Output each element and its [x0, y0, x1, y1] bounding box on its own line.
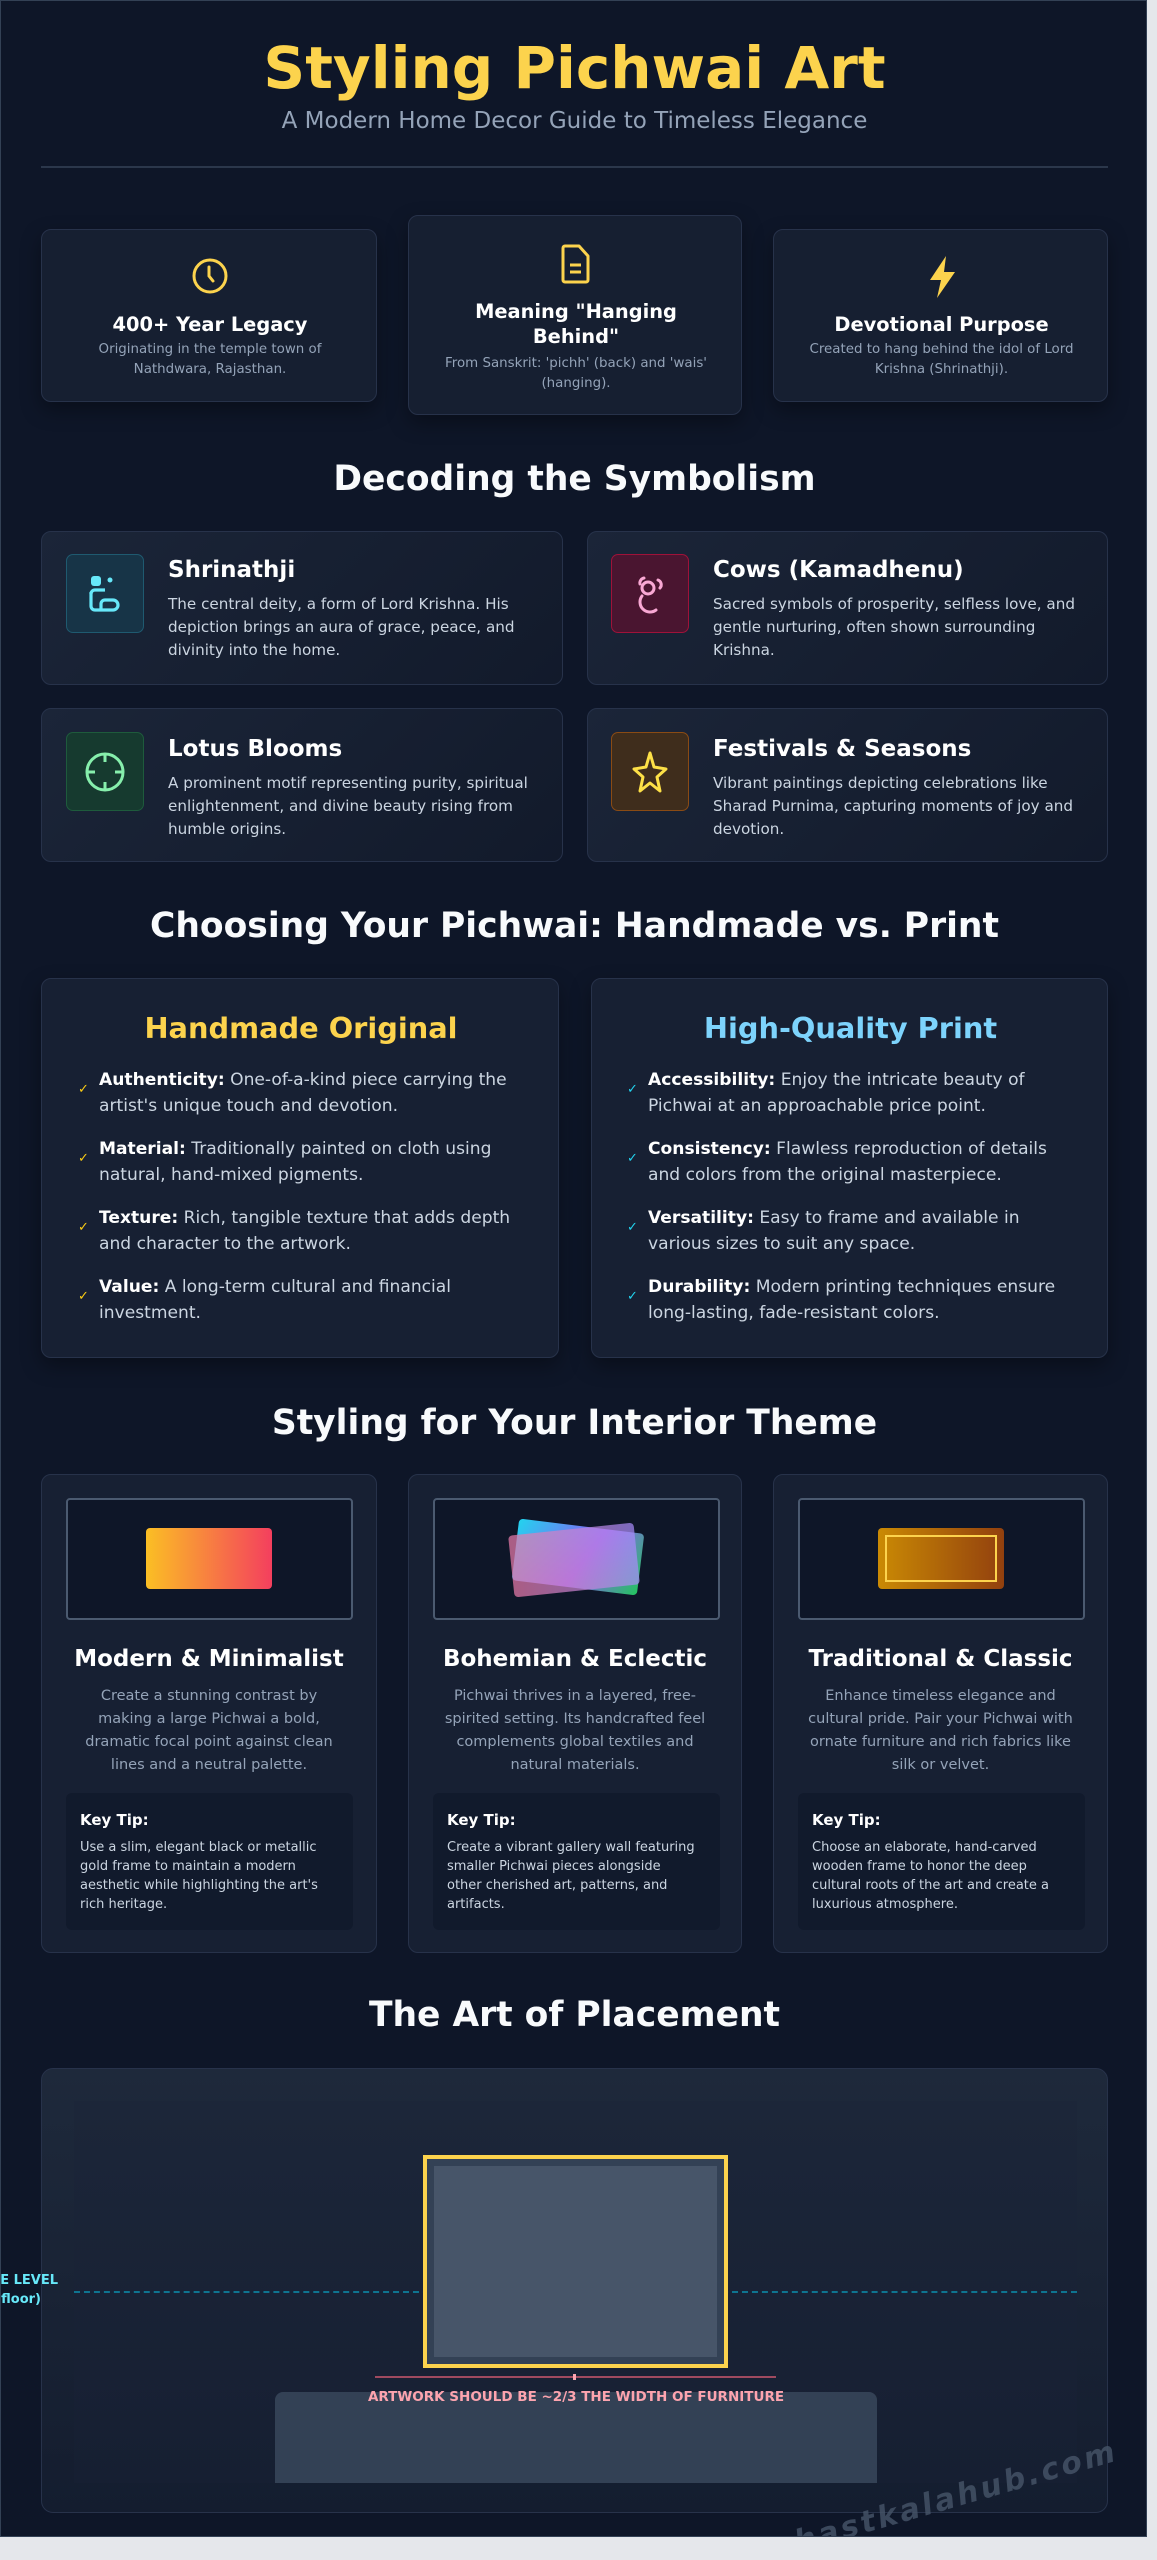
icon: lotus: [66, 732, 144, 811]
eye level line: [74, 2291, 1077, 2293]
furniture: [275, 2392, 877, 2483]
label: width guide: ARTWORK SHOULD BE ~2/3 THE WIDTH OF FURNITURE: [368, 2389, 784, 2405]
callout: traditional tip: cultural roots of the art and create a: [812, 1878, 1049, 1893]
text: traditional: [808, 1688, 1073, 1773]
text: lotus: [168, 774, 528, 838]
list: handmade: Authenticity: One-of-a-kind piece carrying the: [99, 1070, 507, 1090]
list: print: Versatility: Easy to frame and available in: [648, 1208, 1020, 1228]
icon: clock: [192, 258, 228, 294]
heading: festivals: Festivals & Seasons: [713, 736, 971, 762]
icon: document: [562, 244, 590, 284]
list: handmade: ✓: [78, 1082, 89, 1097]
text: festivals: Sharad Purnima, capturing moments of joy and: [713, 797, 1073, 815]
callout: modern tip: Key Tip:: [80, 1811, 149, 1829]
heading: lotus: Lotus Blooms: [168, 736, 342, 762]
text: lotus: A prominent motif representing purity, spiritual: [168, 774, 528, 792]
heading: meaning: [475, 300, 677, 348]
text: modern: Create a stunning contrast by: [101, 1688, 317, 1704]
callout: modern tip: [66, 1793, 353, 1930]
list: handmade: ✓: [78, 1220, 89, 1235]
heading: bohemian: Bohemian & Eclectic: [443, 1646, 707, 1672]
heading: meaning: Behind": [533, 325, 619, 348]
panel: cows: [587, 531, 1108, 685]
heading: placement: The Art of Placement: [369, 1995, 780, 2035]
panel: devotional: [773, 229, 1108, 402]
heading: print: High-Quality Print: [704, 1011, 997, 1045]
text: bohemian: complements global textiles and: [456, 1734, 694, 1750]
panel: modern: [41, 1474, 377, 1953]
panel: festivals: [587, 708, 1108, 862]
callout: modern tip: aesthetic while highlighting the art's: [80, 1878, 318, 1893]
heading: meaning: Meaning "Hanging: [475, 300, 677, 323]
callout: bohemian tip: [433, 1793, 720, 1930]
text: shrinathji: divinity into the home.: [168, 641, 340, 659]
list: handmade: Value: A long-term cultural and financial: [99, 1277, 451, 1297]
list: handmade: ✓: [78, 1151, 89, 1166]
heading: interior theme: Styling for Your Interior Theme: [272, 1403, 877, 1443]
heading: handmade: Handmade Original: [144, 1011, 458, 1045]
list: print: Consistency: Flawless reproduction of details: [648, 1139, 1047, 1159]
text: festivals: [713, 774, 1073, 838]
panel: traditional: [773, 1474, 1108, 1953]
callout: modern tip: Use a slim, elegant black or metallic: [80, 1840, 317, 1855]
text: legacy: Originating in the temple town of: [99, 342, 321, 357]
text: meaning: (hanging).: [541, 376, 611, 390]
text: meaning: From Sanskrit: 'pichh' (back) and 'wais': [445, 356, 707, 371]
list: handmade: investment.: [99, 1303, 201, 1323]
callout: traditional tip: Choose an elaborate, hand-carved: [812, 1840, 1037, 1855]
text: festivals: Vibrant paintings depicting celebrations like: [713, 774, 1048, 792]
heading: cows: Cows (Kamadhenu): [713, 557, 964, 583]
list: handmade: Texture: Rich, tangible texture that adds depth: [99, 1208, 510, 1228]
text: bohemian: [445, 1688, 705, 1773]
list: handmade: and character to the artwork.: [99, 1234, 351, 1254]
heading: modern: Modern & Minimalist: [74, 1646, 344, 1672]
text: bohemian: Pichwai thrives in a layered, free-: [454, 1688, 696, 1704]
list: print: ✓: [627, 1220, 638, 1235]
text: devotional: Krishna (Shrinathji).: [875, 362, 1008, 376]
text: cows: gentle nurturing, often shown surrounding: [713, 618, 1035, 636]
icon: cow: [611, 554, 689, 633]
icon: shrinathji: [66, 554, 144, 633]
callout: traditional tip: luxurious atmosphere.: [812, 1897, 958, 1912]
list: handmade: natural, hand-mixed pigments.: [99, 1165, 363, 1185]
text: modern: lines and a neutral palette.: [111, 1757, 307, 1773]
list: print: long-lasting, fade-resistant colors.: [648, 1303, 940, 1323]
list: print: ✓: [627, 1151, 638, 1166]
text: modern: [85, 1688, 333, 1773]
text: festivals: devotion.: [713, 820, 784, 838]
list: print: various sizes to suit any space.: [648, 1234, 915, 1254]
list: print: and colors from the original masterpiece.: [648, 1165, 1002, 1185]
heading: devotional: Devotional Purpose: [834, 313, 1049, 336]
list: print: Accessibility: Enjoy the intricate beauty of: [648, 1070, 1025, 1090]
list: print: Pichwai at an approachable price point.: [648, 1096, 986, 1116]
text: bohemian: natural materials.: [510, 1757, 640, 1773]
text: modern: dramatic focal point against clean: [85, 1734, 333, 1750]
list: handmade: Material: Traditionally painted on cloth using: [99, 1139, 491, 1159]
title: Styling Pichwai Art: [263, 34, 886, 102]
label: eye level: [0, 2273, 58, 2307]
list: handmade: [78, 1070, 510, 1323]
callout: bohemian tip: Key Tip:: [447, 1811, 516, 1829]
text: traditional: Enhance timeless elegance and: [825, 1688, 1056, 1704]
panel: lotus: [41, 708, 563, 862]
wall: [74, 2101, 1077, 2483]
callout: modern tip: rich heritage.: [80, 1897, 167, 1912]
panel: shrinathji: [41, 531, 563, 685]
text: legacy: [99, 342, 322, 376]
text: modern: making a large Pichwai a bold,: [98, 1711, 320, 1727]
list: print: ✓: [627, 1082, 638, 1097]
text: traditional: cultural pride. Pair your Pichwai with: [808, 1711, 1073, 1727]
heading: shrinathji: Shrinathji: [168, 557, 295, 583]
heading: legacy: 400+ Year Legacy: [113, 313, 307, 336]
icon: star: [611, 732, 689, 811]
artwork frame: [423, 2155, 728, 2368]
text: meaning: [445, 356, 707, 390]
callout: bohemian tip: smaller Pichwai pieces alongside: [447, 1859, 661, 1874]
heading: handmade vs print: Choosing Your Pichwai: Handmade vs. Print: [150, 906, 999, 946]
text: legacy: Nathdwara, Rajasthan.: [134, 362, 286, 376]
text: cows: [713, 595, 1075, 659]
text: lotus: humble origins.: [168, 820, 286, 838]
text: shrinathji: The central deity, a form of Lord Krishna. His: [168, 595, 509, 613]
callout: bohemian tip: artifacts.: [447, 1897, 505, 1912]
panel: placement diagram: [41, 2068, 1108, 2513]
panel: meaning: [408, 215, 742, 415]
text: shrinathji: depiction brings an aura of grace, peace, and: [168, 618, 515, 636]
list: print: [627, 1070, 1055, 1323]
text: bohemian: spirited setting. Its handcrafted feel: [445, 1711, 705, 1727]
callout: traditional tip: Key Tip:: [812, 1811, 881, 1829]
panel: legacy: [41, 229, 377, 402]
panel: bohemian: [408, 1474, 742, 1953]
panel: print: [591, 978, 1108, 1358]
illustration: ornate frame: [798, 1498, 1085, 1620]
width guide: [375, 2376, 776, 2378]
list: print: ✓: [627, 1289, 638, 1304]
panel: handmade: [41, 978, 559, 1358]
callout: bohemian tip: other cherished art, patterns, and: [447, 1878, 667, 1893]
illustration: modern frame: [66, 1498, 353, 1620]
text: traditional: silk or velvet.: [892, 1757, 989, 1773]
text: devotional: Created to hang behind the idol of Lord: [809, 342, 1074, 357]
callout: traditional tip: wooden frame to honor the deep: [812, 1859, 1027, 1874]
text: cows: Sacred symbols of prosperity, selfless love, and: [713, 595, 1075, 613]
list: handmade: ✓: [78, 1289, 89, 1304]
text: devotional: [809, 342, 1074, 376]
heading: traditional: Traditional & Classic: [808, 1646, 1073, 1672]
callout: bohemian tip: Create a vibrant gallery wall featuring: [447, 1840, 695, 1855]
list: handmade: artist's unique touch and devotion.: [99, 1096, 398, 1116]
illustration: layered frames: [433, 1498, 720, 1620]
text: shrinathji: [168, 595, 515, 659]
text: traditional: ornate furniture and rich fabrics like: [810, 1734, 1071, 1750]
callout: traditional tip: [798, 1793, 1085, 1930]
text: cows: Krishna.: [713, 641, 775, 659]
heading: symbolism: Decoding the Symbolism: [333, 459, 816, 499]
icon: lightning: [930, 256, 955, 298]
list: print: Durability: Modern printing techniques ensure: [648, 1277, 1055, 1297]
text: lotus: enlightenment, and divine beauty rising from: [168, 797, 513, 815]
subtitle: A Modern Home Decor Guide to Timeless Elegance: [282, 108, 867, 134]
callout: modern tip: gold frame to maintain a modern: [80, 1859, 296, 1874]
